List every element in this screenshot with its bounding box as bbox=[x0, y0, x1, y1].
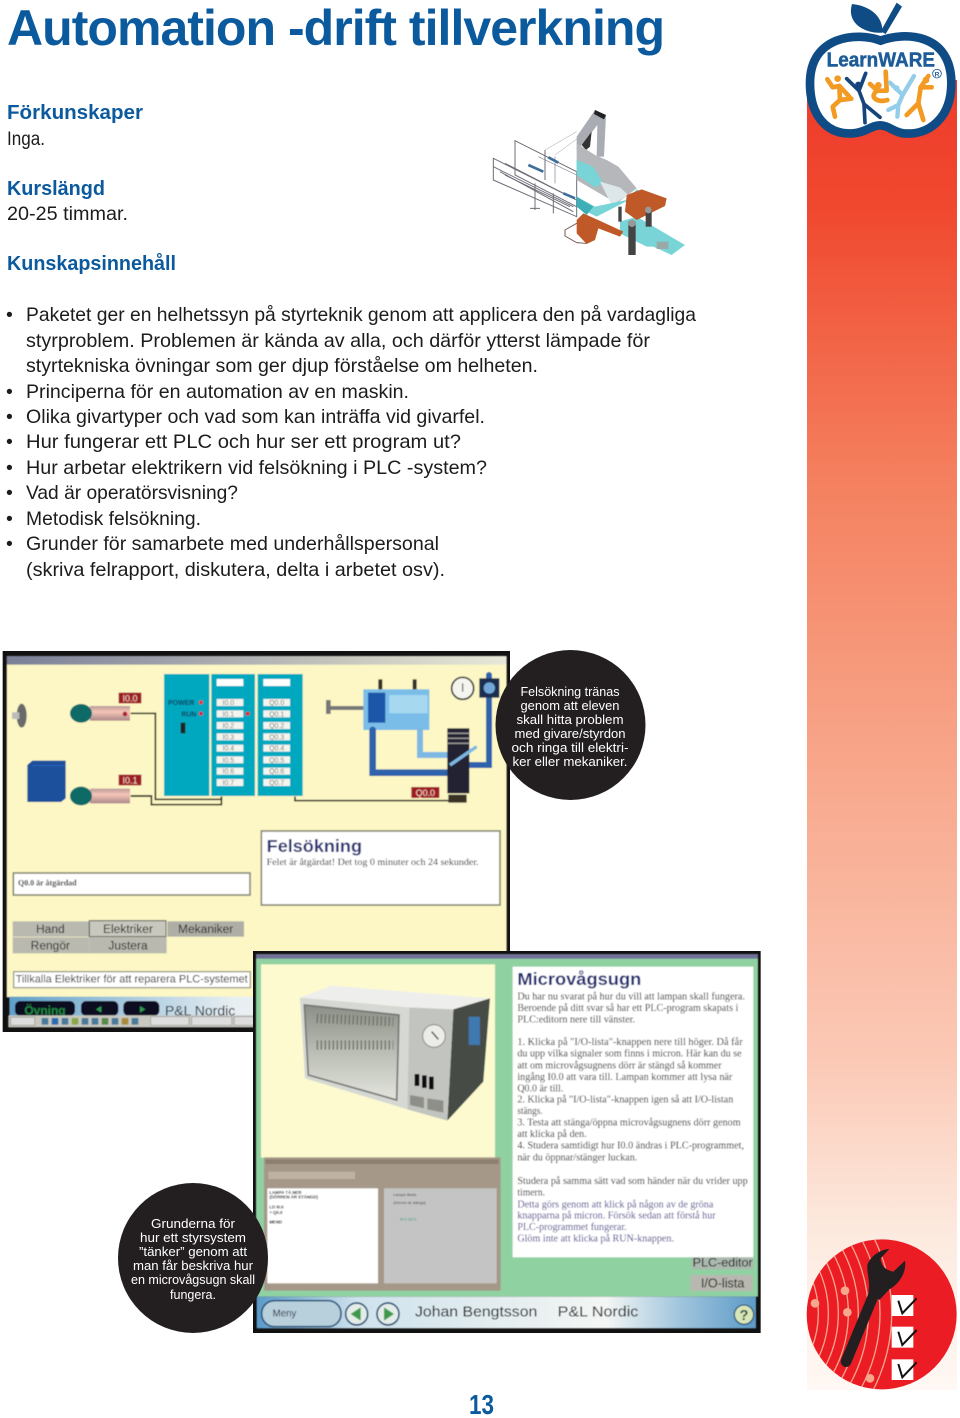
message box: Q0.0 åtgärdad bbox=[13, 873, 250, 895]
message box: Q0.0 åtgärdad: Q0.0 är åtgärdad bbox=[18, 878, 77, 887]
instruction panel: knapparna på micron. Försök sedan att förstå hur bbox=[517, 1211, 716, 1222]
badge: wrench and checklist bbox=[806, 1239, 957, 1390]
screenshot: Felsökning PLC simulation bbox=[3, 651, 510, 1032]
instruction panel: Microvågsugn bbox=[517, 969, 641, 989]
bullet list bbox=[6, 304, 696, 581]
PLC rack: Q0.1 bbox=[269, 711, 284, 718]
PLC rack: Q0.5 bbox=[269, 757, 284, 764]
heading: Förkunskaper: Förkunskaper bbox=[7, 102, 143, 124]
PLC rack: I0.5 bbox=[223, 757, 234, 764]
info box: Felsökning: Felsökning bbox=[267, 836, 362, 856]
bullet list: styrtekniska övningar som ger djup förståelse om helheten. bbox=[26, 355, 538, 377]
bullet list: • bbox=[6, 533, 13, 555]
callout: Grunderna: man får beskriva hur bbox=[133, 1258, 254, 1273]
instruction panel: Beroende på ditt svar så har ett PLC-program skapats i bbox=[517, 1003, 739, 1014]
pressure gauge bbox=[452, 677, 474, 699]
instruction panel: att klicka på den. bbox=[517, 1129, 587, 1140]
button: PLC-editor: PLC-editor bbox=[693, 1256, 753, 1270]
instruction panel: att om microvågsugnens dörr är stängd så kommer bbox=[517, 1060, 722, 1071]
cylinders bbox=[618, 207, 652, 255]
circuit nodes bbox=[811, 1286, 874, 1383]
taskbar bbox=[8, 1015, 508, 1027]
speaker lamp bbox=[12, 704, 27, 728]
PLC editor window: = Q0.0 bbox=[269, 1210, 283, 1215]
instruction panel: Glöm inte att klicka på RUN-knappen. bbox=[517, 1234, 674, 1245]
bullet list: • bbox=[6, 304, 13, 326]
tag Q0.0: Q0.0 bbox=[416, 788, 435, 798]
buttons bbox=[13, 921, 244, 953]
instruction panel: PLC:editorn nere till vänster. bbox=[517, 1014, 635, 1025]
icon: apple outline bbox=[810, 36, 951, 134]
microwave oven bbox=[300, 986, 490, 1121]
navigation bar: P&L Nordic bbox=[558, 1304, 639, 1321]
instruction panel: ingång I0.0 att vara till. Lampan kommer att lysa när bbox=[517, 1072, 733, 1083]
red disc bbox=[807, 1239, 957, 1389]
callout: Felsökning: skall hitta problem bbox=[516, 712, 624, 727]
instruction panel: du upp vilka signaler som finns i micron. Här kan du se bbox=[517, 1049, 742, 1060]
wireframe parts bbox=[493, 132, 586, 243]
PLC rack: Q0.4 bbox=[269, 746, 284, 753]
value: duration: 20-25 timmar. bbox=[7, 204, 128, 225]
bullet list: Grunder för samarbete med underhållspersonal bbox=[26, 533, 439, 555]
tag I0.1: I0.1 bbox=[122, 775, 137, 785]
icon: dancing figures bbox=[827, 72, 932, 123]
PLC editor window: (DÖRREN ÄR STÄNGD) bbox=[269, 1195, 318, 1200]
bullet list: Principerna för en automation av en maskin. bbox=[26, 381, 409, 403]
instruction box: Tillkalla Elektriker för att reparera PLC-systemet bbox=[16, 974, 248, 986]
buttons: Elektriker bbox=[103, 922, 153, 936]
navigation bar bbox=[257, 1297, 756, 1328]
bullet list: • bbox=[6, 457, 13, 479]
wires bbox=[131, 713, 455, 805]
icon: apple leaf and stem bbox=[851, 3, 902, 34]
PLC rack: I0.3 bbox=[223, 734, 234, 741]
callout: Felsökning: Felsökning tränas bbox=[520, 684, 620, 699]
tag I0.0: I0.0 bbox=[122, 693, 137, 703]
instruction panel: 3. Testa att stänga/öppna microvågsugnens dörr genom bbox=[517, 1118, 741, 1129]
info box: Felsökning bbox=[261, 831, 500, 905]
PLC rack: Q0.2 bbox=[269, 723, 284, 730]
callout: Grunderna: fungera. bbox=[170, 1287, 216, 1302]
PLC rack: Q0.7 bbox=[269, 780, 284, 787]
bullet list: (skriva felrapport, diskutera, delta i arbetet osv). bbox=[26, 559, 445, 581]
tag I0.1 bbox=[119, 775, 141, 785]
heading: Kunskapsinnehåll: Kunskapsinnehåll bbox=[7, 252, 176, 275]
callout: Grunderna bbox=[118, 1183, 268, 1333]
PLC rack: I0.0 bbox=[223, 700, 234, 707]
instruction panel: Q0.0 är till. bbox=[517, 1083, 563, 1094]
PLC rack: I0.7 bbox=[223, 780, 234, 787]
circuit lines bbox=[812, 1240, 892, 1389]
info box: Felsökning: Felet är åtgärdat! Det tog 0 minuter och 24 sekunder. bbox=[267, 857, 479, 868]
PLC rack: I0.6 bbox=[223, 769, 234, 776]
bullet list: Paketet ger en helhetssyn på styrteknik genom att applicera den på vardagliga bbox=[26, 304, 696, 326]
bullet list: Metodisk felsökning. bbox=[26, 508, 201, 530]
callout: Felsökning: med givare/styrdon bbox=[514, 726, 626, 741]
blue cube bbox=[27, 761, 66, 802]
title bar bbox=[256, 954, 758, 959]
buttons: Hand bbox=[36, 922, 65, 936]
PLC rack: I0.4 bbox=[223, 746, 234, 753]
PLC editor window bbox=[264, 1157, 501, 1291]
callout: Grunderna: Grunderna för bbox=[151, 1216, 236, 1231]
bullet list: • bbox=[6, 508, 13, 530]
callout: Felsökning: och ringa till elektri- bbox=[512, 740, 628, 755]
pressure source bbox=[479, 678, 499, 698]
buttons: Rengör bbox=[31, 938, 70, 952]
red gradient side strip bbox=[807, 80, 957, 1390]
screenshot: Microvågsugn bbox=[253, 951, 761, 1333]
instruction panel: 2. Klicka på "I/O-lista"-knappen igen så att I/O-listan bbox=[517, 1095, 733, 1106]
PLC rack bbox=[164, 674, 303, 796]
icon: wrench bbox=[846, 1249, 905, 1362]
orange blocks bbox=[577, 189, 667, 244]
instruction panel: 1. Klicka på "I/O-lista"-knappen nere till höger. Då får bbox=[517, 1037, 743, 1048]
instruction panel: Studera på samma sätt vad som händer när du vrider upp bbox=[517, 1176, 748, 1187]
logo: LearnWARE apple bbox=[810, 3, 951, 134]
pneumatic cylinder bbox=[326, 679, 429, 730]
bullet list: • bbox=[6, 431, 13, 453]
window frame bbox=[253, 951, 761, 1333]
navigation bar: Meny bbox=[273, 1308, 296, 1319]
PLC rack: RUN bbox=[181, 711, 196, 718]
checklist bbox=[892, 1295, 917, 1380]
registered mark: R bbox=[935, 71, 940, 78]
PLC rack: Q0.6 bbox=[269, 769, 284, 776]
bullet list: Hur fungerar ett PLC och hur ser ett program ut? bbox=[26, 431, 461, 453]
callout: Grunderna: en microvågsugn skall bbox=[131, 1272, 255, 1287]
instruction panel: 4. Studera samtidigt hur I0.0 ändras i PLC-programmet, bbox=[517, 1141, 744, 1152]
logo wordmark: LearnWARE bbox=[827, 50, 935, 72]
buttons: Justera bbox=[108, 938, 148, 952]
registered mark bbox=[933, 69, 941, 78]
value: Inga: Inga. bbox=[7, 129, 45, 150]
bullet list: • bbox=[6, 381, 13, 403]
callout: Grunderna: ”tänker” genom att bbox=[139, 1244, 247, 1259]
title bar bbox=[7, 656, 507, 665]
bullet list: Olika givartyper och vad som kan inträffa vid givarfel. bbox=[26, 406, 485, 428]
navigation bar bbox=[9, 997, 509, 1018]
callout: Grunderna: hur ett styrsystem bbox=[140, 1230, 246, 1245]
instruction panel: stängs. bbox=[517, 1106, 543, 1117]
button: I/O-lista bbox=[691, 1275, 753, 1291]
buttons: Mekaniker bbox=[178, 922, 233, 936]
PLC editor window: Lampa tänds bbox=[393, 1192, 416, 1197]
PLC editor window: LAMPA TÄ NER bbox=[269, 1190, 302, 1195]
bullet list: Hur arbetar elektrikern vid felsökning i PLC -system? bbox=[26, 457, 487, 479]
PLC rack: Q0.0 bbox=[269, 700, 284, 707]
gantry column bbox=[577, 110, 606, 157]
grey back plate bbox=[577, 143, 637, 203]
PLC editor window: (Dörren är stängd) bbox=[393, 1200, 427, 1205]
bullet list: • bbox=[6, 482, 13, 504]
instruction panel: timern. bbox=[517, 1187, 545, 1198]
tag I0.0 bbox=[119, 693, 141, 703]
window frame bbox=[3, 651, 510, 1032]
navigation bar: Övning bbox=[24, 1003, 66, 1018]
PLC rack: Q0.3 bbox=[269, 734, 284, 741]
illustration: 3D machine bbox=[493, 110, 685, 255]
instruction panel bbox=[513, 967, 753, 1257]
tag Q0.0 bbox=[411, 787, 439, 798]
title: Automation -drift tillverkning bbox=[7, 0, 665, 56]
text block: prerequisites bbox=[7, 102, 176, 275]
callout: Felsökning: genom att eleven bbox=[520, 698, 620, 713]
instruction panel: PLC-programmet fungerar. bbox=[517, 1222, 627, 1233]
yellow workspace bbox=[7, 664, 507, 997]
bullet list: • bbox=[6, 406, 13, 428]
air hoses bbox=[373, 675, 489, 773]
PLC rack: I0.2 bbox=[223, 723, 234, 730]
instruction panel: när du öppnar/stänger luckan. bbox=[517, 1153, 637, 1164]
navigation bar: Johan Bengtsson bbox=[415, 1304, 537, 1321]
PLC editor window: LD I0.0 bbox=[269, 1204, 284, 1209]
sensor I0.0 bbox=[70, 704, 130, 723]
navigation bar: P&L Nordic bbox=[165, 1002, 235, 1018]
yellow viewport bbox=[261, 964, 495, 1158]
valve bbox=[447, 728, 477, 803]
cyan conveyor bbox=[577, 160, 685, 255]
PLC rack: POWER bbox=[168, 700, 194, 707]
navigation bar: ? bbox=[740, 1308, 749, 1324]
sensor I0.1 bbox=[70, 787, 130, 805]
bullet list: styrproblem. Problemen är kända av alla, och därför ytterst lämpade för bbox=[26, 330, 651, 352]
PLC editor window: I0.0 Q0.0 bbox=[400, 1217, 417, 1222]
PLC editor window: MEND bbox=[269, 1219, 282, 1224]
callout: Felsökning bbox=[496, 650, 646, 800]
PLC rack: I0.1 bbox=[223, 711, 234, 718]
instruction panel: Du har nu svarat på hur du vill att lampan skall fungera. bbox=[517, 991, 745, 1002]
heading: Kurslängd: Kurslängd bbox=[7, 178, 105, 200]
callout: Felsökning: ker eller mekaniker. bbox=[512, 754, 628, 769]
green background bbox=[256, 958, 758, 1297]
bullet list: Vad är operatörsvisning? bbox=[26, 482, 238, 504]
instruction panel: Detta görs genom att klick på någon av de gröna bbox=[517, 1199, 714, 1210]
button: I/O-lista: I/O-lista bbox=[701, 1276, 745, 1290]
